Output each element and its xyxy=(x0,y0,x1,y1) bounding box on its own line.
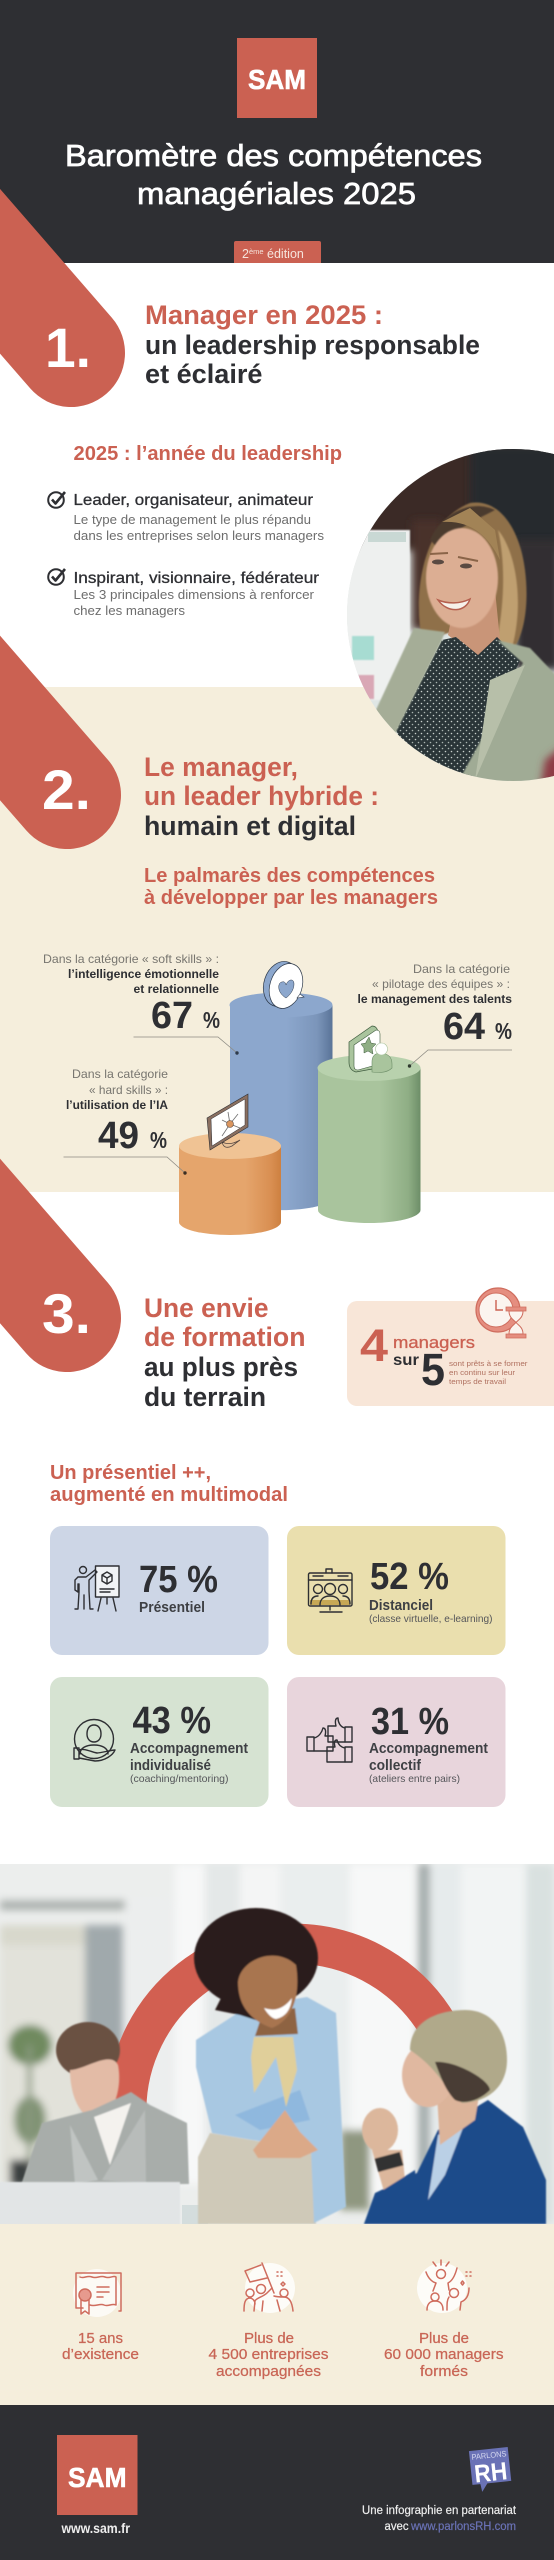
figure: managers: 60 000 managers xyxy=(384,2347,504,2363)
badge: edition: édition xyxy=(264,247,304,261)
heading: section 1: Manager en 2025 : xyxy=(145,300,383,330)
heading: section 1: un leadership responsable xyxy=(145,330,480,360)
card: accompagnement collectif xyxy=(287,1677,506,1807)
heading: section 2 xyxy=(144,752,379,841)
logo: SAM: SAM xyxy=(248,64,306,95)
callout: 4 managers sur 5: sur xyxy=(393,1352,419,1369)
figure: managers: formés xyxy=(420,2364,468,2380)
number 2: 2. xyxy=(42,758,91,821)
heading: section 1: et éclairé xyxy=(145,359,262,389)
callout: soft skills 67%: l’intelligence émotionnelle xyxy=(68,967,219,981)
card: distanciel: Distanciel xyxy=(369,1598,433,1614)
item: leader: dans les entreprises selon leurs managers xyxy=(74,529,324,543)
figure: entreprises: 4 500 entreprises xyxy=(208,2347,328,2363)
icon: thumbs up xyxy=(307,1718,352,1762)
neck and face xyxy=(448,594,500,655)
icon: heart bubble xyxy=(258,957,308,1013)
subheading: palmarès xyxy=(144,865,438,909)
callout: hard skills 49%: l’utilisation de l’IA xyxy=(66,1098,168,1112)
callout: soft skills 67%: Dans la catégorie « soft skills » : xyxy=(43,952,219,966)
figure: 15 ans: d’existence xyxy=(62,2347,139,2363)
subheading: présentiel xyxy=(50,1462,288,1506)
card: distanciel xyxy=(287,1526,506,1655)
diagonal pill 3 xyxy=(0,1011,67,1318)
figure: 15 ans: 15 ans xyxy=(78,2331,123,2347)
callout: hard skills 49%: 49 xyxy=(98,1115,139,1157)
item: inspirant xyxy=(48,569,319,618)
badge: edition xyxy=(234,241,321,263)
card: présentiel xyxy=(50,1526,268,1655)
partnership text xyxy=(362,2503,517,2533)
figure: entreprises: accompagnées xyxy=(216,2364,321,2380)
card: accompagnement collectif: Accompagnement xyxy=(369,1741,488,1757)
callout: pilotage 64%: « pilotage des équipes » : xyxy=(372,977,510,991)
figure: managers xyxy=(384,2260,504,2380)
card: accompagnement collectif: collectif xyxy=(369,1758,421,1774)
jacket xyxy=(376,628,446,734)
item: inspirant: Inspirant, visionnaire, fédérateur xyxy=(74,570,319,587)
cylinder: orange xyxy=(179,1133,281,1235)
callout: 4 managers sur 5 xyxy=(347,1288,554,1406)
card: distanciel: (classe virtuelle, e-learning) xyxy=(369,1613,492,1625)
title xyxy=(65,138,482,211)
heading: section 3: au plus près xyxy=(144,1352,298,1382)
icon: AI monitor xyxy=(207,1094,248,1150)
heading: section 2: humain et digital xyxy=(144,811,356,841)
blouse xyxy=(396,637,520,790)
callout: 4 managers sur 5: sont prêts à se former xyxy=(449,1359,528,1368)
heading: section 2: Le manager, xyxy=(144,752,298,782)
callout: soft skills 67% xyxy=(43,952,239,1055)
icon: flag group xyxy=(244,2263,295,2313)
callout: 4 managers sur 5: managers xyxy=(393,1333,475,1352)
callout: pilotage 64%: Dans la catégorie xyxy=(413,962,510,976)
right woman xyxy=(362,2010,546,2224)
callout: pilotage 64%: le management des talents xyxy=(358,992,512,1006)
card: accompagnement collectif: 31 % xyxy=(371,1701,449,1743)
icon: certificate xyxy=(73,2269,121,2317)
chart: cylinders xyxy=(179,957,420,1235)
heading: section 3: de formation xyxy=(144,1322,306,1352)
subheading: présentiel: Un présentiel ++, xyxy=(50,1462,211,1484)
card: distanciel: 52 % xyxy=(370,1556,449,1598)
partnership text: www.parlonsRH.com xyxy=(410,2519,516,2533)
cylinder: blue xyxy=(230,992,332,1210)
item: leader xyxy=(48,492,324,543)
number 3: 3. xyxy=(42,1282,91,1345)
icon: check xyxy=(48,492,65,508)
laptop xyxy=(0,2182,180,2226)
card: accompagnement individualisé: individualisé xyxy=(130,1758,211,1774)
panel: key figures xyxy=(0,2224,554,2405)
icon: person in hand xyxy=(74,1720,115,1761)
hair xyxy=(419,502,527,650)
callout: hard skills 49%: Dans la catégorie xyxy=(72,1067,168,1081)
card: accompagnement individualisé: (coaching/mentoring) xyxy=(130,1773,228,1785)
callout: 4 managers sur 5: en continu sur leur xyxy=(449,1368,516,1377)
figure: entreprises xyxy=(208,2263,328,2380)
item: inspirant: chez les managers xyxy=(74,604,185,618)
callout: soft skills 67%: 67 xyxy=(151,995,193,1037)
panel: header xyxy=(0,0,554,263)
callout: soft skills 67%: % xyxy=(203,1007,220,1033)
subheading: année du leadership: 2025 : l’année du leadership xyxy=(74,442,342,465)
icon: video conference xyxy=(308,1569,352,1612)
callout: pilotage 64% xyxy=(358,962,512,1068)
logo: SAM xyxy=(237,38,317,118)
panel: cream background section 2 xyxy=(0,687,554,1192)
callout: hard skills 49% xyxy=(64,1067,187,1175)
partnership text: Une infographie en partenariat xyxy=(362,2503,517,2517)
subheading: présentiel: augmenté en multimodal xyxy=(50,1484,288,1506)
callout: hard skills 49%: % xyxy=(150,1127,167,1153)
card: accompagnement individualisé: Accompagnement xyxy=(130,1741,248,1757)
logo: SAM footer xyxy=(57,2435,138,2515)
heading: section 3 xyxy=(144,1293,306,1412)
diagonal pill 1 xyxy=(0,41,71,353)
item: leader: Le type de management le plus répandu xyxy=(74,513,311,527)
figure: 15 ans xyxy=(62,2269,139,2363)
callout: hard skills 49%: « hard skills » : xyxy=(89,1083,168,1097)
coral arc xyxy=(115,1924,453,2104)
photo: smiling manager in a circle xyxy=(340,445,554,790)
icon: cheering people xyxy=(417,2260,471,2313)
left woman xyxy=(21,2022,189,2185)
icon: trainer with flipchart xyxy=(75,1566,119,1611)
callout: 4 managers sur 5: 4 xyxy=(360,1320,388,1371)
badge: edition: ème xyxy=(249,247,264,256)
heading: section 3: Une envie xyxy=(144,1293,268,1323)
icon: star person xyxy=(349,1026,392,1072)
partnership text: avec xyxy=(384,2519,408,2533)
badge: edition: 2 xyxy=(242,247,249,261)
subheading: palmarès: à développer par les managers xyxy=(144,887,438,909)
subheading: palmarès: Le palmarès des compétences xyxy=(144,865,435,887)
figure: entreprises: Plus de xyxy=(244,2331,294,2347)
icon: check xyxy=(48,569,65,585)
link: sam.fr: www.sam.fr xyxy=(61,2521,131,2536)
logo: SAM footer: SAM xyxy=(68,2462,126,2493)
card: accompagnement collectif: (ateliers entre pairs) xyxy=(369,1773,460,1785)
logo: Parlons RH xyxy=(469,2447,512,2493)
logo: Parlons RH: RH xyxy=(473,2457,509,2489)
title: managériales 2025 xyxy=(137,176,416,211)
panel: footer xyxy=(0,2405,554,2560)
cylinder: green xyxy=(318,1055,420,1223)
item: inspirant: Les 3 principales dimensions à renforcer xyxy=(74,588,314,602)
title: Baromètre des compétences xyxy=(65,138,482,173)
icon: clock and hourglass xyxy=(476,1288,526,1338)
heading: section 3: du terrain xyxy=(144,1382,266,1412)
card: présentiel: 75 % xyxy=(139,1559,218,1601)
item: leader: Leader, organisateur, animateur xyxy=(74,492,313,509)
card: présentiel: Présentiel xyxy=(139,1600,205,1616)
number 1: 1. xyxy=(45,316,91,379)
diagonal pill 2 xyxy=(0,488,67,795)
callout: soft skills 67%: et relationnelle xyxy=(134,982,219,996)
centre woman xyxy=(194,1908,346,2224)
photo: team meeting with coral arc xyxy=(0,1864,554,2226)
figure: managers: Plus de xyxy=(419,2331,469,2347)
heading: section 1 xyxy=(145,300,480,389)
logo: Parlons RH: PARLONS xyxy=(471,2449,507,2462)
heading: section 2: un leader hybride : xyxy=(144,781,379,811)
card: accompagnement individualisé xyxy=(50,1677,268,1807)
callout: 4 managers sur 5: temps de travail xyxy=(449,1377,506,1386)
callout: 4 managers sur 5: 5 xyxy=(421,1344,445,1395)
callout: pilotage 64%: % xyxy=(495,1018,512,1044)
card: accompagnement individualisé: 43 % xyxy=(132,1700,211,1742)
callout: pilotage 64%: 64 xyxy=(443,1006,485,1048)
